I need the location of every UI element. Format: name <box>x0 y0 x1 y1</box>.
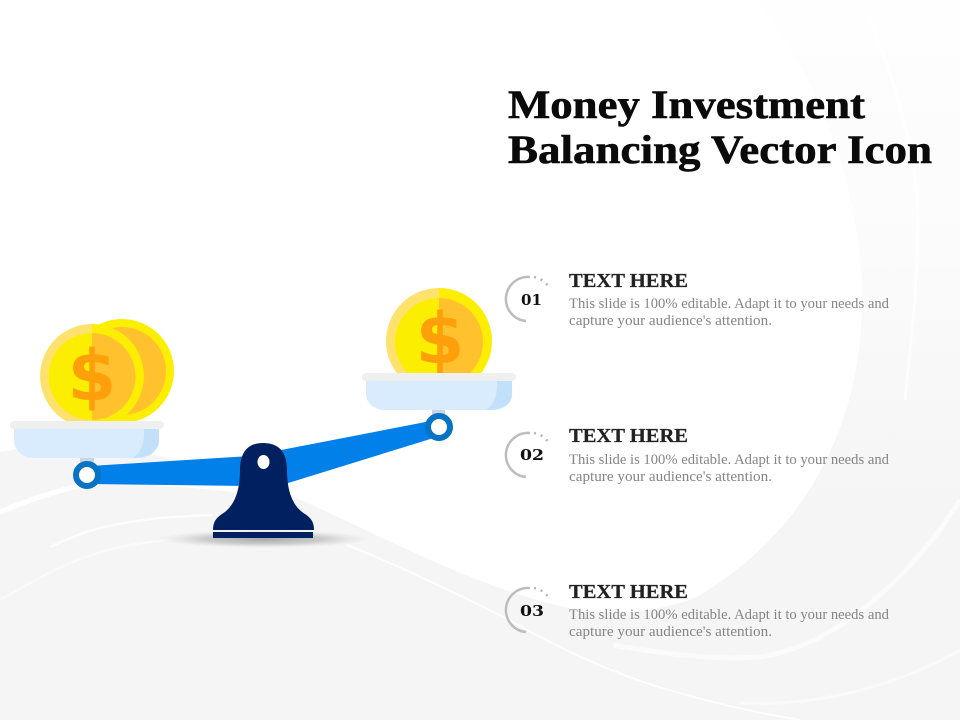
right pan <box>362 373 516 410</box>
item 01: TEXT HERE <box>569 270 688 292</box>
title <box>508 82 932 172</box>
item 03: TEXT HERE <box>569 581 688 603</box>
item 03: This slide is 100% editable. Adapt it to your needs and <box>569 607 889 623</box>
number badge 02 <box>506 433 550 477</box>
item 02: TEXT HERE <box>569 425 688 447</box>
item 02: This slide is 100% editable. Adapt it to your needs and <box>569 452 889 468</box>
item 03 <box>506 581 889 640</box>
right coin: $ <box>416 298 464 380</box>
base shadow <box>158 530 370 548</box>
number badge 01 <box>506 277 550 321</box>
number badge 01: 01 <box>521 292 542 309</box>
beam <box>90 420 440 486</box>
item 02: capture your audience's attention. <box>569 469 772 485</box>
item 03: capture your audience's attention. <box>569 624 772 640</box>
number badge 02: 02 <box>520 447 544 464</box>
left coins <box>40 319 174 428</box>
number badge 03 <box>506 588 550 632</box>
left coins: $ <box>68 335 116 417</box>
item 02 <box>506 425 889 485</box>
left pan <box>10 421 164 458</box>
balance scale <box>10 288 516 548</box>
item 01 <box>506 270 889 329</box>
left pivot ring <box>76 458 98 486</box>
right pivot ring <box>428 408 450 438</box>
item 01: This slide is 100% editable. Adapt it to your needs and <box>569 296 889 312</box>
stand <box>213 443 314 538</box>
right coin <box>386 288 492 394</box>
item 01: capture your audience's attention. <box>569 313 772 329</box>
title: Balancing Vector Icon <box>508 127 932 172</box>
title: Money Investment <box>508 82 866 127</box>
number badge 03: 03 <box>520 603 544 620</box>
